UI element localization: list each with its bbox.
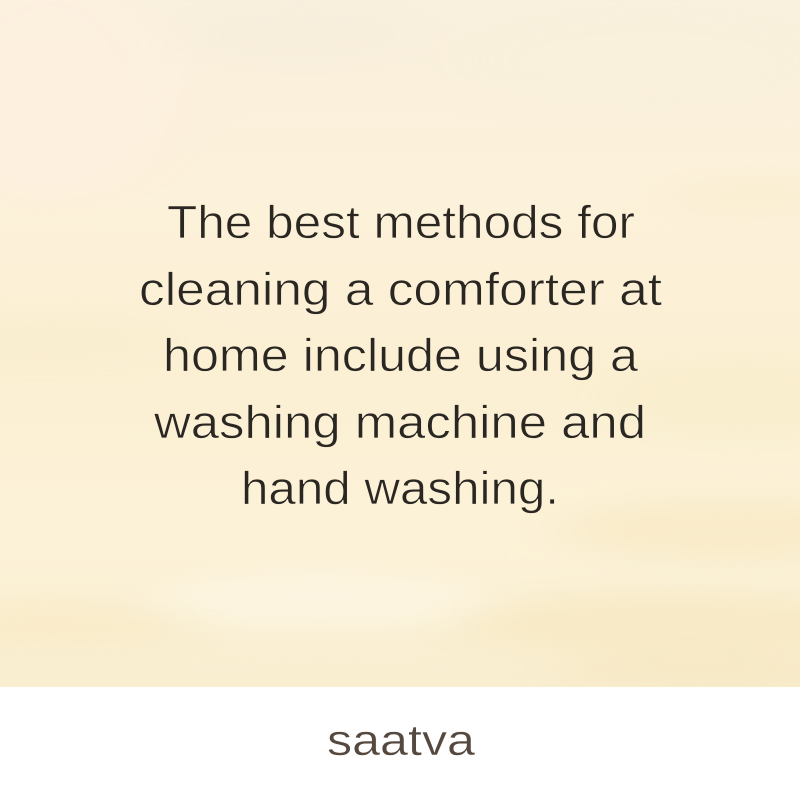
main statement text: [139, 196, 662, 514]
main statement text: washing machine and: [153, 396, 646, 448]
panel: white footer band: [0, 687, 800, 800]
main statement text: hand washing.: [241, 462, 559, 514]
main statement text: cleaning a comforter at: [139, 263, 662, 315]
logo: saatva wordmark: saatva: [327, 716, 476, 765]
main statement text: home include using a: [163, 329, 638, 381]
main statement text: The best methods for: [167, 196, 635, 248]
